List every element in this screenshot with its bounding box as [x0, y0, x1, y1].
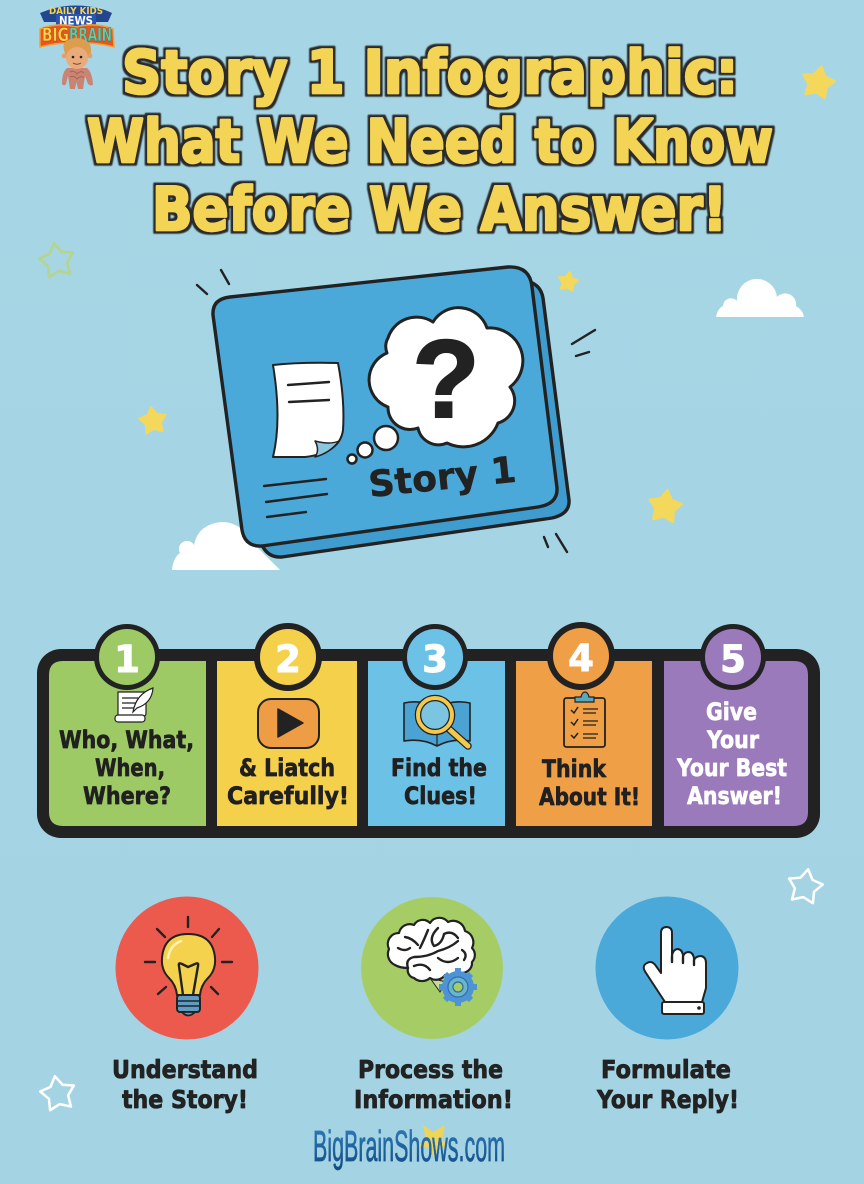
step 5: Give — [706, 698, 757, 726]
label — [112, 1055, 258, 1114]
step 4: About It! — [539, 783, 640, 811]
step 4 — [516, 622, 652, 826]
step 5: Your Best — [676, 754, 787, 782]
label: the Story! — [122, 1085, 248, 1114]
icon: white cloud top right — [716, 279, 804, 317]
illustration: Story 1 card — [213, 267, 569, 557]
step 2 — [217, 623, 357, 826]
icon: white outline star right — [786, 866, 825, 904]
icon: yellow star right of card — [647, 488, 683, 523]
logo: Daily Kids News with Big Brain — [40, 6, 114, 89]
title: Story 1 Infographic: — [122, 38, 738, 108]
label: Information! — [354, 1085, 513, 1114]
panel: formulate your reply — [596, 896, 739, 1114]
panel: five steps — [37, 622, 820, 838]
title: Before We Answer! — [152, 175, 727, 245]
step 1 — [49, 624, 206, 826]
icon: yellow star left — [138, 405, 168, 434]
icon: green outline star — [37, 240, 76, 278]
label: Formulate — [601, 1055, 731, 1084]
step 3: Clues! — [404, 782, 477, 810]
label: Process the — [358, 1055, 503, 1084]
panel: understand the story — [112, 896, 258, 1114]
step 5 — [664, 624, 808, 826]
icon: small yellow star near card — [557, 270, 580, 292]
icon: paper note — [273, 363, 343, 457]
step 4: 4 — [568, 637, 594, 680]
step 5: Answer! — [687, 782, 782, 810]
step 2: Carefully! — [227, 782, 349, 810]
step 3: 3 — [422, 638, 448, 681]
icon: light bulb — [145, 917, 232, 1016]
front page of card — [213, 267, 557, 546]
icon: white cloud under card — [172, 522, 280, 570]
icon: brain with gear — [388, 918, 477, 1006]
step 1: Where? — [83, 782, 171, 810]
step 4: Think — [542, 755, 607, 783]
step 3: Find the — [391, 754, 487, 782]
step 1: Who, What, — [59, 726, 194, 754]
step 3 — [368, 624, 505, 826]
icon: pointing hand — [644, 927, 706, 1014]
logo: Daily Kids News with Big Brain: DAILY KIDS — [49, 6, 103, 17]
label: Your Reply! — [596, 1085, 739, 1114]
text lines on card — [264, 479, 327, 517]
step 5: Your — [706, 726, 759, 754]
step 1: 1 — [114, 638, 140, 681]
step 5: 5 — [720, 638, 746, 681]
logo: Daily Kids News with Big Brain: BRAIN — [69, 24, 112, 46]
text: BigBrainShows.com — [313, 1122, 505, 1171]
icon: thought cloud with question mark: ? — [412, 318, 480, 441]
icon: yellow star top right — [800, 64, 837, 99]
title: What We Need to Know — [87, 107, 773, 177]
footer: website — [313, 1122, 505, 1171]
icon: thought cloud with question mark — [348, 308, 523, 464]
logo: Daily Kids News with Big Brain: NEWS — [59, 14, 93, 28]
logo: Daily Kids News with Big Brain: BIG — [42, 24, 69, 46]
icon: brain boy mascot — [62, 38, 93, 89]
step 2: 2 — [275, 638, 301, 681]
icon: clipboard checklist — [564, 692, 605, 747]
icon: scroll and quill — [115, 688, 153, 722]
panel: process the information — [354, 897, 513, 1114]
icon: white outline star left — [38, 1073, 77, 1111]
label — [596, 1055, 739, 1114]
title — [87, 38, 773, 245]
card label: Story 1 — [367, 450, 518, 506]
icon: book and magnifier — [404, 698, 470, 746]
step 1: When, — [95, 754, 165, 782]
motion ticks around card — [197, 270, 595, 552]
icon: play button — [258, 699, 319, 748]
label — [354, 1055, 513, 1114]
step 2: & Liatch — [239, 754, 335, 782]
label: Understand — [112, 1055, 258, 1084]
back page of card — [262, 282, 569, 557]
